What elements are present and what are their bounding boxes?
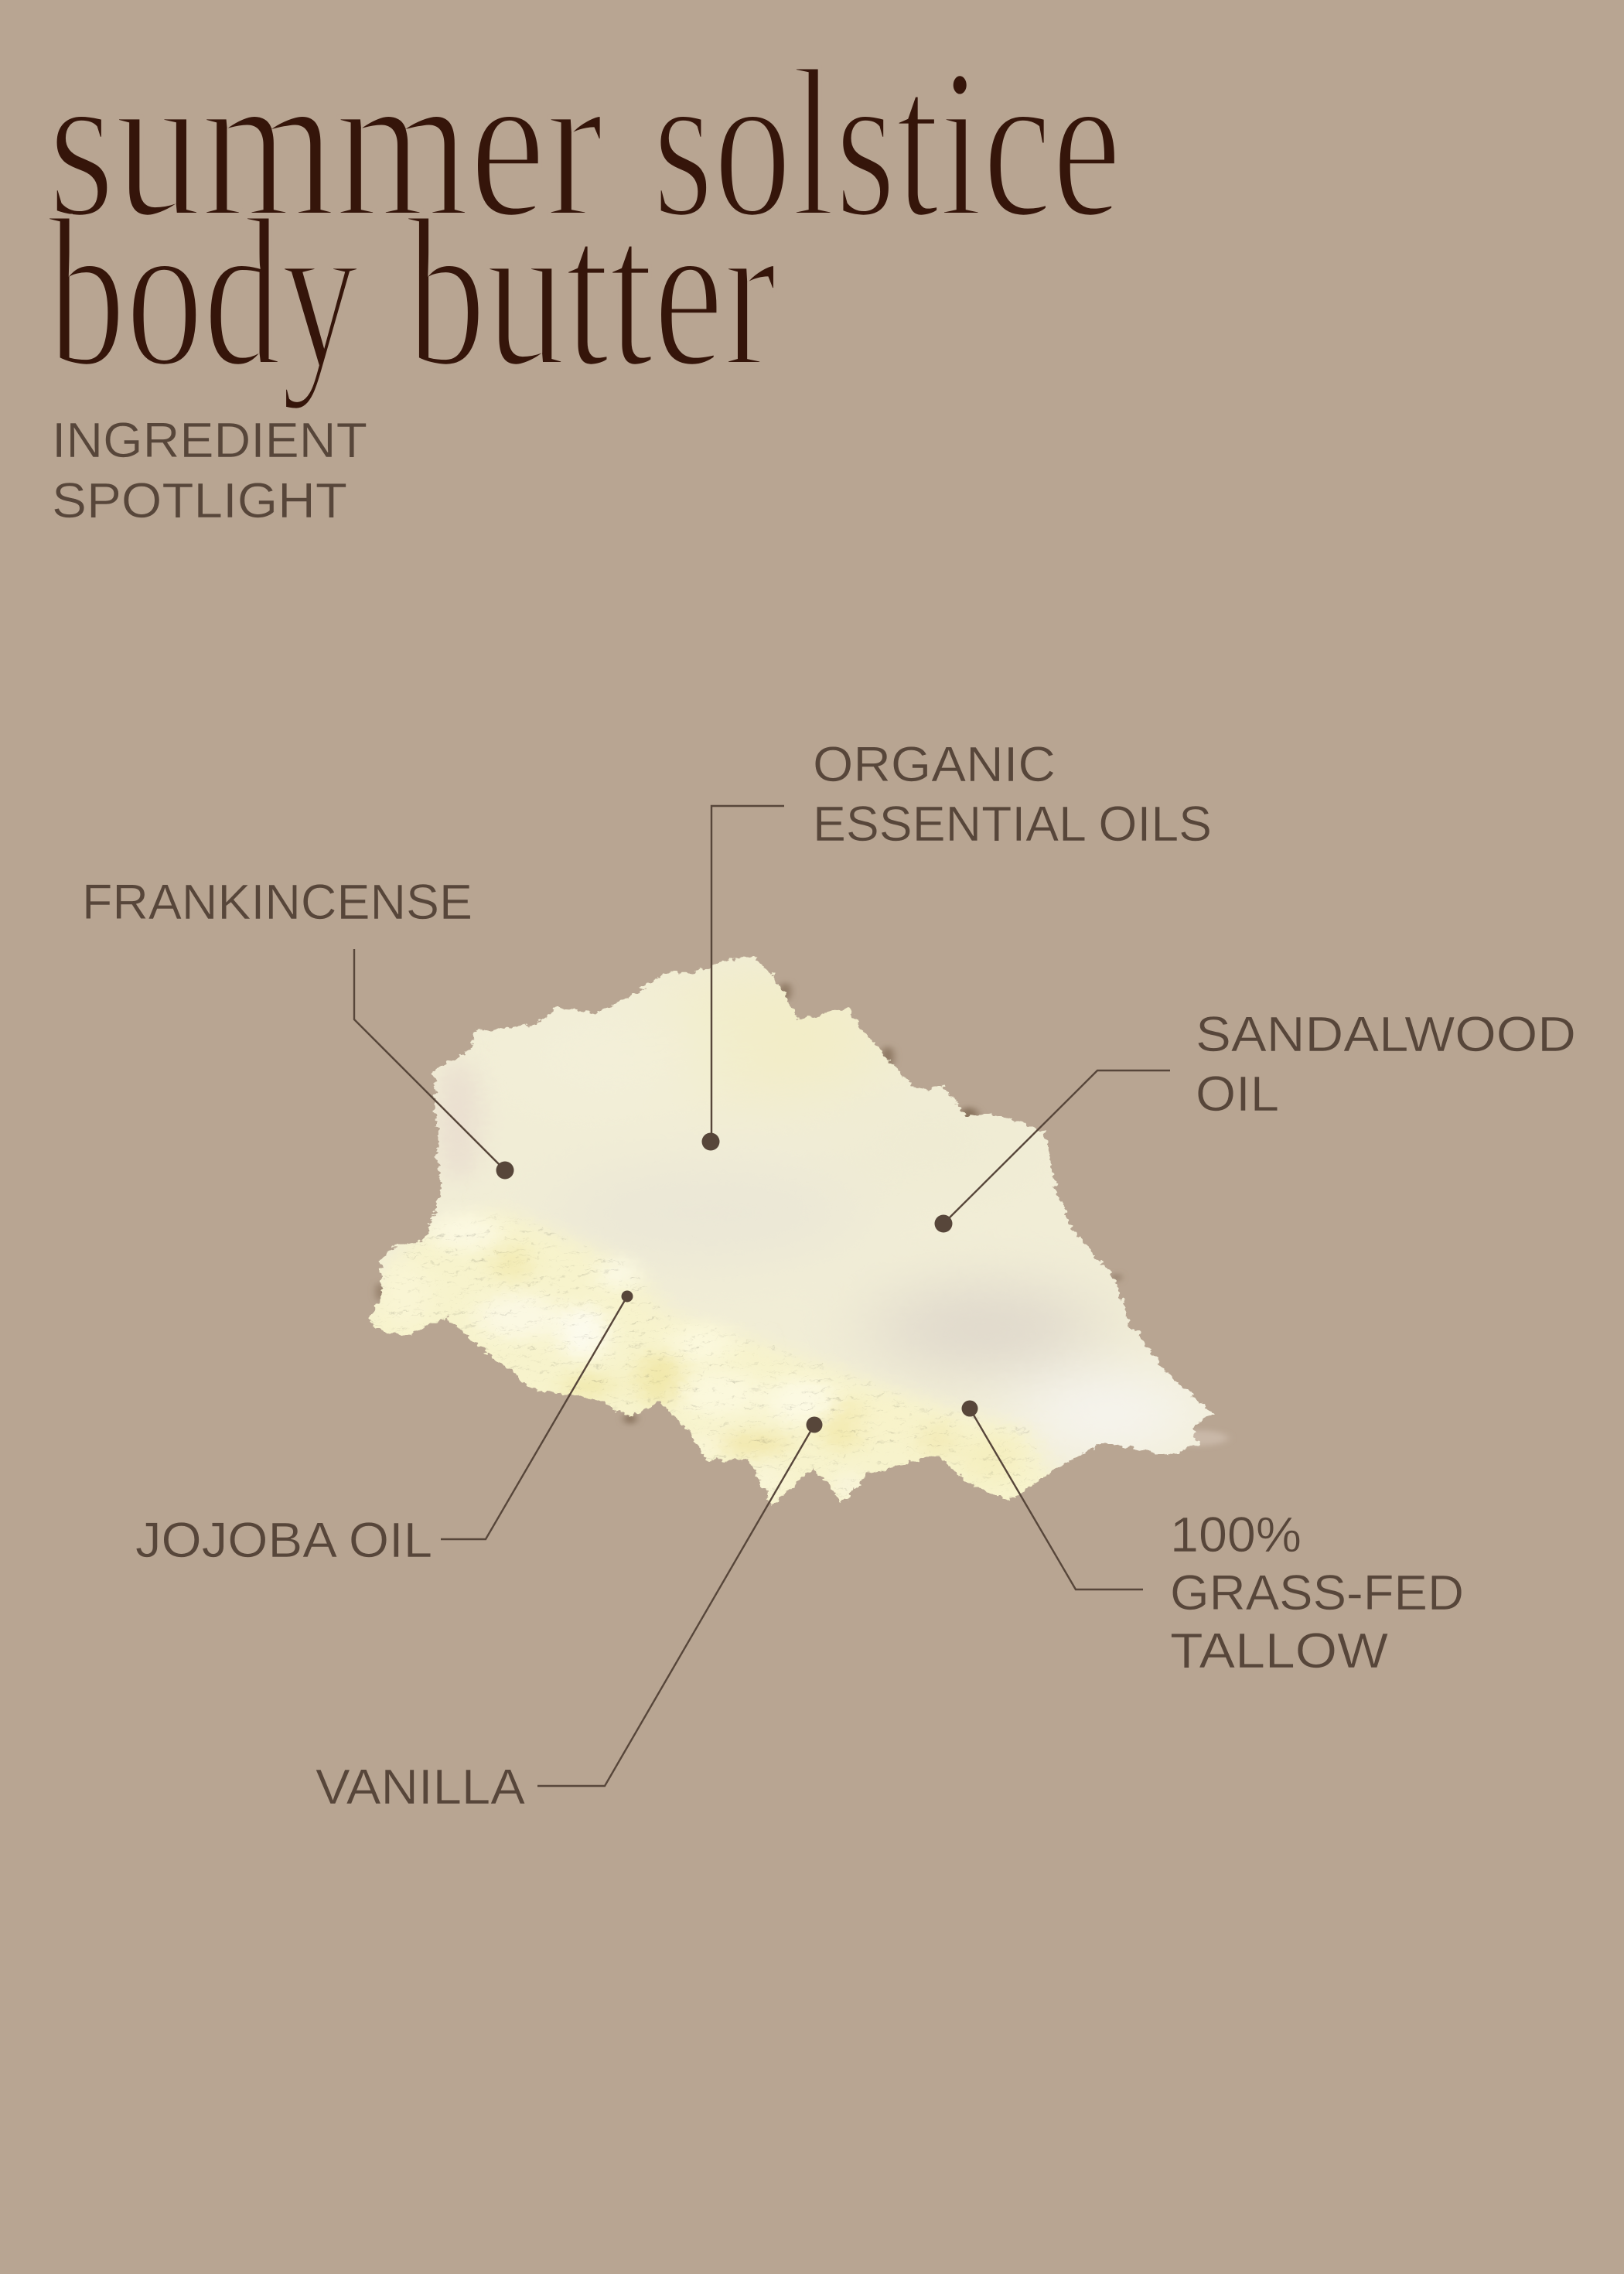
label: FRANKINCENSE (82, 874, 473, 930)
subtitle: SPOTLIGHT (52, 473, 347, 528)
label (1196, 1006, 1576, 1122)
label: TALLOW (1170, 1623, 1389, 1678)
label: SANDALWOOD (1196, 1006, 1576, 1062)
subtitle (52, 412, 367, 528)
label: VANILLA (316, 1759, 525, 1815)
label: GRASS-FED (1170, 1565, 1464, 1620)
callout: sandalwood oil (934, 1006, 1576, 1233)
callout: frankincense (82, 874, 513, 1179)
marker dot (934, 1214, 953, 1233)
leader line (354, 949, 505, 1170)
label: ESSENTIAL OILS (813, 796, 1212, 852)
callout: organic essential oils (702, 736, 1212, 1151)
leader line (943, 1070, 1170, 1224)
label (1170, 1507, 1464, 1678)
callout: jojoba oil (135, 1290, 633, 1568)
label: 100% (1170, 1507, 1302, 1562)
title word: body: body (48, 174, 359, 411)
body butter swatch image (368, 956, 1227, 1506)
leader line (537, 1425, 814, 1786)
title word: solstice: solstice (653, 25, 1121, 261)
leader line (711, 806, 784, 1142)
marker dot (496, 1162, 513, 1179)
leader line (441, 1296, 627, 1539)
swatch body (368, 956, 1215, 1506)
marker dot (806, 1417, 823, 1432)
lumpy lower crumbs (368, 1223, 1046, 1501)
title word: butter: butter (407, 174, 776, 411)
label: OIL (1196, 1066, 1279, 1122)
callout: grass-fed tallow (962, 1400, 1464, 1678)
marker dot (622, 1290, 633, 1303)
callout: vanilla (316, 1417, 823, 1815)
marker dot (962, 1400, 977, 1417)
marker dot (702, 1132, 719, 1151)
label (813, 736, 1212, 852)
subtitle: INGREDIENT (52, 412, 367, 468)
title (48, 25, 1121, 411)
title word: summer: summer (48, 25, 603, 261)
tonal shading (704, 978, 1206, 1459)
leader line (970, 1408, 1143, 1589)
label: JOJOBA OIL (135, 1512, 432, 1568)
crumb highlights and hollows (382, 1213, 1021, 1501)
label: ORGANIC (813, 736, 1056, 792)
swatch under-shadows (377, 982, 1228, 1446)
